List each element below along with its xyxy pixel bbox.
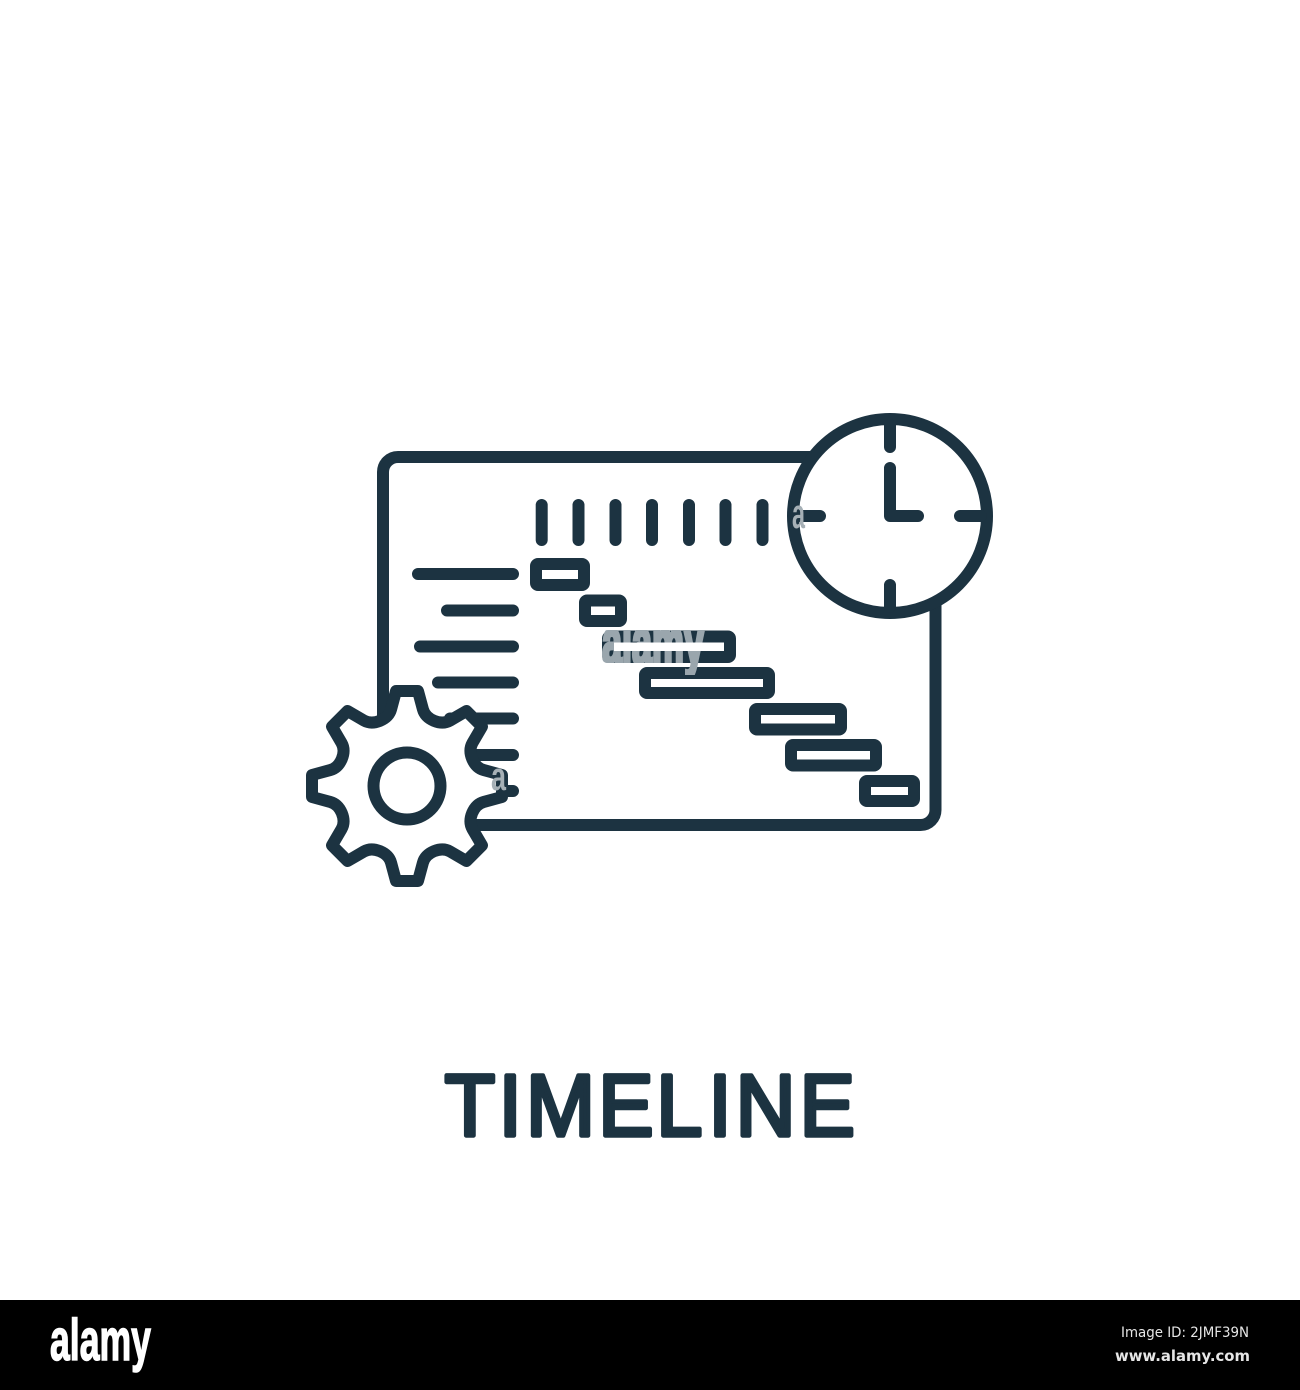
website: www.alamy.com: [1115, 1347, 1250, 1365]
gear outline: [312, 691, 502, 881]
watermark fragment near clock: a: [792, 490, 805, 537]
gantt bar 1: [536, 564, 584, 585]
gantt bar 5: [755, 709, 841, 730]
icon: clock: [793, 419, 987, 613]
title: TIMELINE: [445, 1057, 855, 1154]
icon: timeline gantt board: [383, 457, 936, 825]
clock hour marks: [799, 425, 981, 607]
gantt bars: [536, 564, 914, 801]
gantt bar 2: [585, 600, 621, 621]
gantt time ticks: [542, 505, 762, 540]
alamy logo: alamy: [50, 1308, 151, 1373]
icon: gear: [312, 691, 502, 881]
watermark fragment near gear: a: [491, 755, 507, 799]
clock hands: [890, 468, 918, 516]
gear hub: [374, 752, 440, 820]
image id: Image ID: 2JMF39N: [1121, 1325, 1249, 1341]
gantt bar 3: [608, 636, 730, 657]
board frame: [383, 457, 936, 825]
watermark: alamy over gantt bar: alamy: [602, 606, 704, 678]
footer bar: [0, 1300, 1300, 1390]
task list lines: [418, 574, 513, 791]
gantt bar 4: [645, 673, 769, 693]
clock face: [793, 419, 987, 613]
infographic canvas: [0, 413, 1300, 1390]
gantt bar 6: [791, 745, 876, 766]
gantt bar 7: [865, 781, 914, 801]
